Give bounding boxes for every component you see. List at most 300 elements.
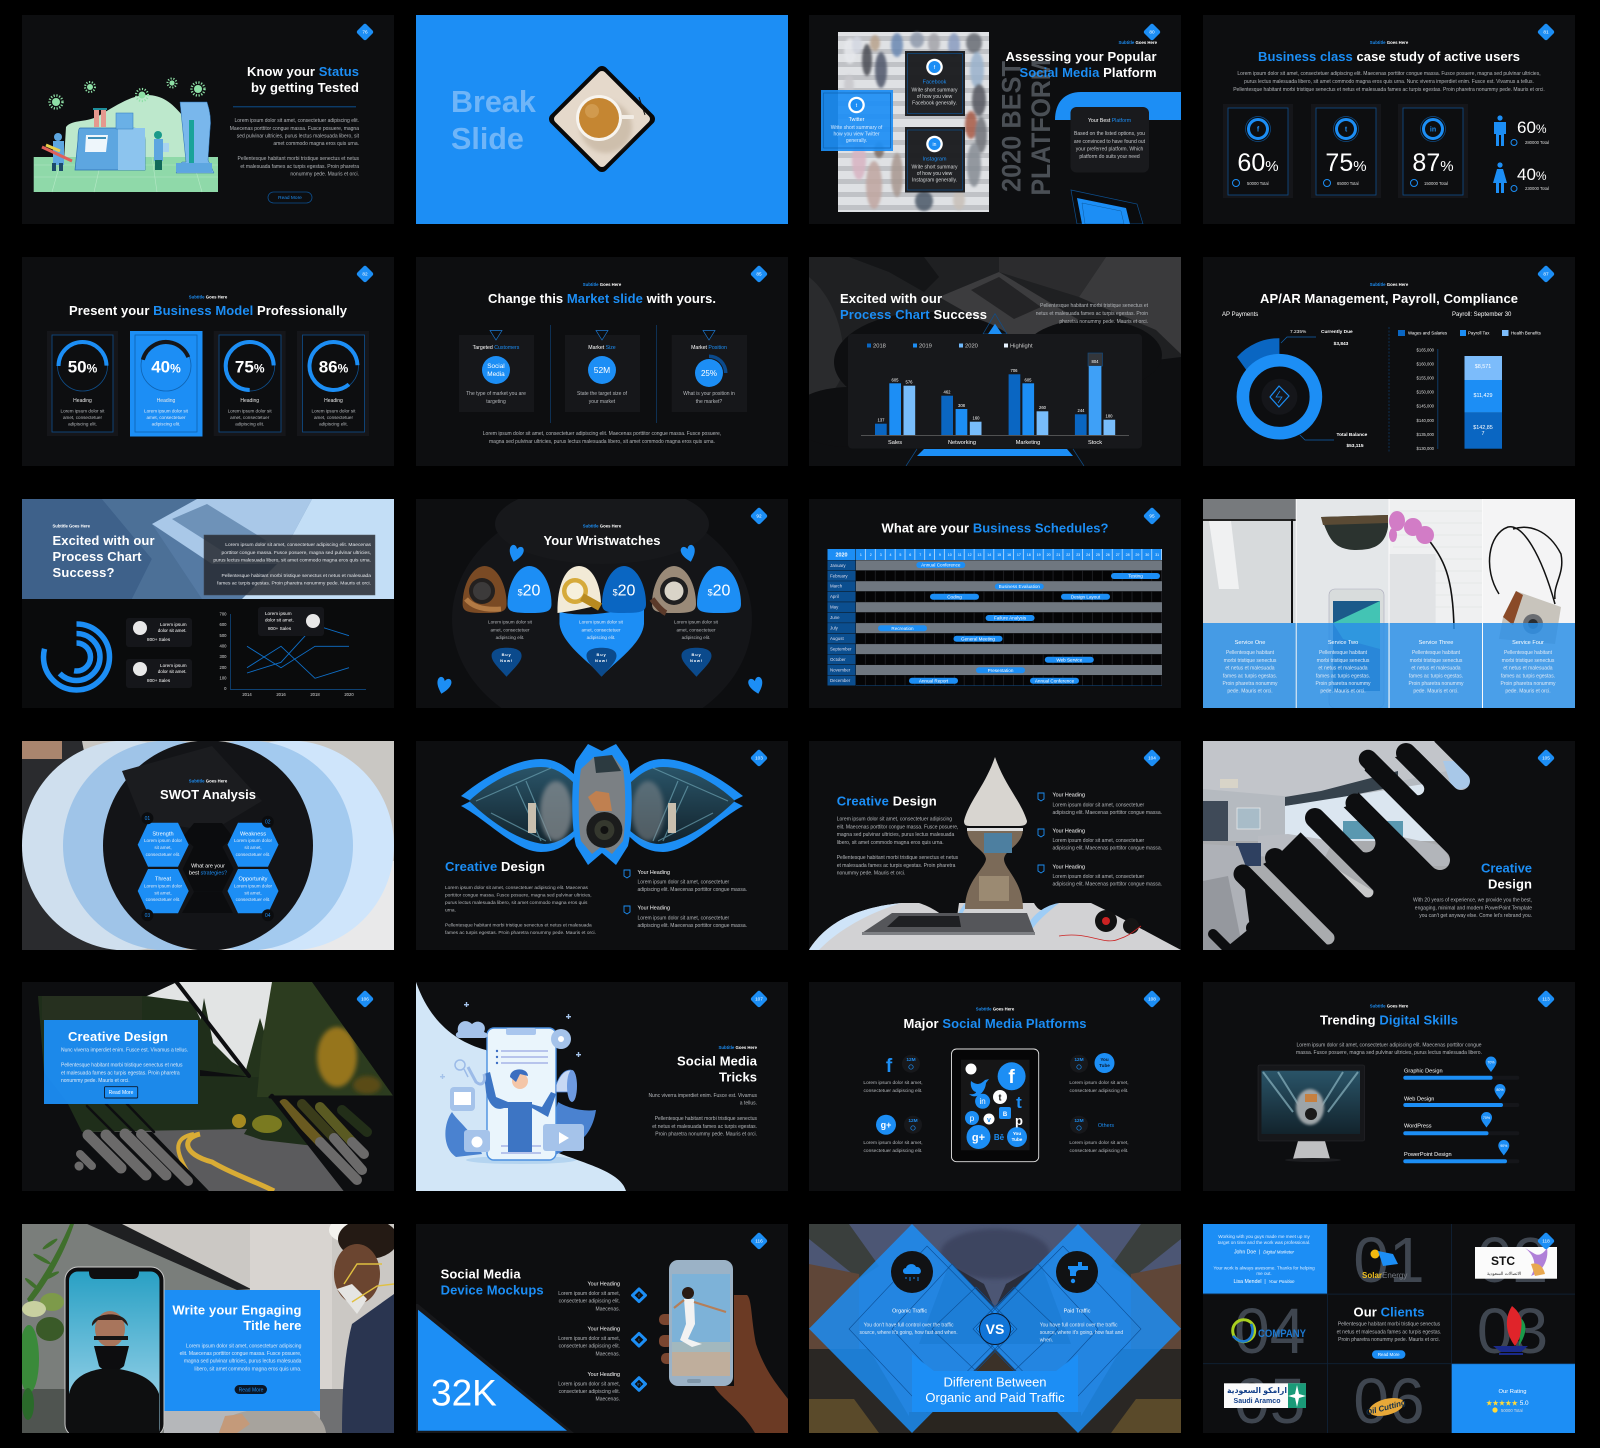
bar chart: 180	[1106, 414, 1113, 418]
body text: nonummy pede. Mauris et orci.	[837, 871, 905, 877]
service panel 1	[1203, 623, 1296, 708]
badge: 107	[755, 997, 763, 1002]
line chart: 600	[220, 622, 227, 627]
skill bar: wordpress: WordPress	[1404, 1124, 1432, 1130]
facebook stat: Lorem ipsum dolor sit amet,	[863, 1080, 923, 1086]
gantt chart header: 13	[977, 553, 981, 557]
card: market position: 25%	[701, 369, 717, 378]
badge	[1540, 268, 1552, 280]
panel: slide 118 our clients	[1203, 1224, 1575, 1437]
card: your best platform: are convinced to have found out	[1074, 139, 1146, 145]
slide background	[809, 499, 1181, 708]
list item 1	[558, 1281, 646, 1312]
checklist item 3: Lorem ipsum dolor sit amet, consectetuer	[1052, 874, 1145, 880]
y axis: $165,000	[1417, 348, 1435, 352]
road photo	[22, 982, 394, 1191]
card: 86%	[297, 331, 369, 436]
stacked bar chart: $8,571	[1475, 364, 1491, 370]
card: 75%	[214, 331, 286, 436]
stat card 2	[126, 659, 192, 688]
slide background	[809, 982, 1181, 1191]
header text: Process Chart	[52, 549, 142, 564]
card: 40% highlighted: amet, consectetuer	[146, 415, 186, 420]
service panel 4: pede. Mauris et orci.	[1505, 689, 1551, 695]
schedule bars: Annual Report	[919, 678, 949, 683]
title: Trending Digital Skills	[1320, 1013, 1458, 1028]
google plus stat: Lorem ipsum dolor sit amet,	[863, 1140, 923, 1146]
intro text: Pellentesque habitant morbi tristique senectus et netus et malesuada fames ac turpis egestas. Proin pharetra nonummy pede. Mauris et orci.	[1233, 87, 1545, 93]
tooltip card: Lorem ipsum	[265, 611, 292, 616]
monitor with photo	[1258, 1065, 1365, 1162]
card: market size: 52M	[594, 365, 610, 375]
quadrant numbers: 01	[145, 816, 150, 822]
gantt chart header: 14	[987, 553, 991, 557]
gantt chart header: 23	[1076, 553, 1080, 557]
body text: sed pulvinar ultricies, purus lectus malesuada libero, sit	[237, 134, 360, 140]
device corner graphic	[1071, 190, 1143, 224]
panel: slide 80 popular social media platform	[809, 15, 1181, 224]
testimonial cell: Lisa Mendel | Your Position	[1234, 1279, 1295, 1285]
gantt chart header: 8	[929, 553, 931, 557]
service panel 3: et netus et malesuada	[1411, 666, 1461, 672]
list item 3: in	[637, 1382, 641, 1387]
card: 40% highlighted	[130, 331, 202, 436]
skill bar: powerpoint design: PowerPoint Design	[1404, 1152, 1452, 1158]
testimonial cell	[1203, 1224, 1327, 1294]
organic traffic text: You don't have full control over the traffic	[864, 1322, 954, 1328]
gantt chart header: 28	[1126, 553, 1130, 557]
service panel 3: morbi tristique senectus	[1410, 658, 1463, 664]
card: 86%: Heading	[324, 398, 343, 404]
blue text card: et malesuada fames ac turpis egestas. Proin pharetra	[61, 1070, 180, 1076]
tablet with social icons: p	[1015, 1113, 1023, 1128]
card: your best platform: platform do suits your need	[1079, 154, 1140, 160]
panel: slide 103 creative design wings	[416, 741, 788, 950]
card: your best platform	[1070, 107, 1149, 172]
slide background	[809, 741, 1181, 950]
bar chart: 137	[878, 418, 885, 422]
service panel 3: Proin pharetra nonummy	[1408, 681, 1464, 687]
footer text: magna sed pulvinar ultricies, purus lectus malesuada libero, sit amet commodo magna eros quis urna.	[489, 439, 715, 445]
panel: SWOT analysis	[22, 740, 394, 950]
bar chart: 576	[906, 380, 913, 384]
schedule bars: Web Service	[1056, 657, 1083, 662]
column dividers	[550, 325, 657, 423]
badge	[1540, 26, 1552, 38]
panel: slide 116 device mockups	[416, 1224, 788, 1433]
google plus stat: 12M	[908, 1118, 918, 1124]
logo: oil flame	[1493, 1306, 1528, 1355]
photo background: office	[19, 1218, 398, 1433]
list item 3	[558, 1372, 646, 1403]
hexagon: threat: consectetuer elit.	[146, 897, 180, 902]
heading: Break Slide: Break	[451, 85, 536, 119]
stat card 1: 800+ Sales	[147, 637, 171, 642]
blue text card: Creative Design	[68, 1029, 168, 1044]
title: Social Media	[441, 1267, 521, 1282]
gantt chart header: 20	[1047, 553, 1051, 557]
card: targeted customers: targeting	[486, 399, 506, 405]
dark text box: Lorem ipsum dolor sit amet, consectetuer adipiscing elit. Maecenas	[225, 542, 372, 548]
male statistic: 60%	[1517, 118, 1547, 137]
illustration: phone with man and megaphone	[440, 1002, 596, 1164]
gantt chart header: 12	[968, 553, 972, 557]
checklist item 3	[1038, 864, 1162, 888]
diamond: organic traffic	[809, 1224, 1015, 1433]
gantt chart header: 29	[1135, 553, 1139, 557]
service panel 1: morbi tristique senectus	[1224, 658, 1277, 664]
badge	[753, 1235, 765, 1247]
hexagon: strength: Lorem ipsum dolor	[144, 838, 182, 843]
donut callouts: Total Balance	[1336, 432, 1368, 438]
line chart: 500	[220, 633, 227, 638]
title banner	[912, 1354, 1078, 1412]
paid traffic text: when.	[1040, 1338, 1053, 1344]
list item 1: f	[638, 1293, 640, 1298]
schedule bars: Design Layout	[1071, 594, 1101, 599]
buy now buttons: Buy	[502, 652, 512, 657]
checklist item 3: adipiscing elit. Maecenas porttitor congue massa.	[1052, 882, 1162, 888]
hexagon: threat	[138, 869, 189, 913]
month labels: November	[830, 668, 851, 672]
card: Facebook: Facebook generally.	[912, 100, 957, 106]
panel: slide 82 business model	[22, 257, 394, 466]
checklist item 2	[624, 906, 747, 929]
product descriptions: Lorem ipsum dolor sit	[579, 620, 624, 625]
panel: engaging title with phone photo	[19, 1218, 398, 1438]
slide background	[1203, 982, 1575, 1191]
subtitle: Subtitle Goes Here	[1370, 1003, 1409, 1008]
body text: Pellentesque habitant morbi tristique senectus et netus et malesuada	[445, 923, 592, 929]
youtube stat: consectetuer adipiscing elit.	[1070, 1088, 1128, 1094]
buy now buttons: Buy	[597, 652, 606, 657]
blue title panel: Write your Engaging	[172, 1303, 301, 1318]
service panel 4: et netus et malesuada	[1503, 666, 1553, 672]
line chart: 2014	[242, 692, 252, 697]
body text: Lorem ipsum dolor sit amet, consectetuer adipiscing elit.	[234, 118, 359, 124]
striped interior photo	[1203, 741, 1575, 950]
body text: et netus et malesuada fames ac turpis egestas.	[652, 1124, 757, 1130]
y axis: $150,000	[1417, 390, 1435, 394]
card: targeted customers: Social	[487, 363, 505, 370]
blue title panel	[164, 1290, 320, 1411]
watch photo 2	[557, 566, 601, 613]
y axis: $130,000	[1417, 446, 1435, 451]
hexagon: weakness	[228, 823, 278, 867]
our clients text	[1337, 1304, 1441, 1359]
checklist item 2	[1038, 829, 1162, 852]
legend: Wages and Salaries	[1408, 330, 1448, 336]
youtube stat: 12M	[1074, 1057, 1084, 1063]
big numerals: 05	[1234, 1365, 1305, 1437]
card: 50%: Heading	[73, 398, 92, 404]
service panel 2: fames ac turpis egestas.	[1316, 674, 1370, 680]
stat card: 60%: 60%	[1237, 149, 1279, 177]
blue title panel: Lorem ipsum dolor sit amet, consectetuer adipiscing	[186, 1343, 302, 1349]
blue text card: nonummy pede. Mauris et orci.	[61, 1078, 130, 1084]
badge: 95	[1149, 514, 1155, 519]
buy now buttons: Now!	[595, 658, 608, 663]
dark text box: fames ac turpis egestas. Proin pharetra nonummy pede. Mauris et orci.	[217, 580, 371, 586]
stat card: 87%: 150000 Total	[1424, 181, 1448, 186]
tablet with social icons: in	[979, 1097, 986, 1106]
bar chart: 706	[1010, 368, 1018, 373]
stat card 2: dolor sit amet.	[158, 669, 187, 674]
hexagon: strength: Strength	[152, 831, 174, 837]
bar chart: 260	[1039, 405, 1047, 410]
coffee cup in diamond	[555, 72, 649, 166]
blue triangle with 32K	[416, 1304, 574, 1433]
month labels: December	[830, 678, 851, 683]
body text: Proin pharetra nonummy pede. Mauris et orci.	[655, 1132, 757, 1138]
photo background	[22, 741, 394, 950]
body text: porttitor congue massa. Fusce posuere, magna sed pulvinar ultricies,	[445, 893, 592, 899]
badge: 92	[756, 514, 762, 519]
donut chart	[1237, 338, 1316, 433]
logo: STC: STC	[1491, 1254, 1515, 1268]
card: 50%: Lorem ipsum dolor sit	[61, 409, 105, 414]
card: Instagram: Instagram	[923, 156, 947, 162]
divider	[1388, 327, 1390, 452]
donut callouts: Currently Due	[1321, 329, 1353, 335]
service panel 2: Service Two	[1328, 640, 1358, 646]
bar chart: 160	[972, 416, 980, 420]
testimonial cell: target on time and the work was professional.	[1218, 1240, 1310, 1245]
bar chart: 2018	[873, 344, 886, 350]
logo: solar energy: SolarEnergy	[1362, 1271, 1407, 1280]
badge	[1540, 1235, 1552, 1247]
card: 40% highlighted: 40%	[151, 358, 181, 376]
skill bar: web design: 80%	[1496, 1088, 1504, 1092]
side text: netus et malesuada fames ac turpis egestas. Proin	[1036, 311, 1148, 317]
list item 2: consectetuer adipiscing elit.	[559, 1344, 620, 1350]
blue text card: Nunc viverra imperdiet enim. Fusce est. Vivamus a tellus.	[61, 1047, 188, 1053]
body text: fames ac turpis egestas. Proin pharetra nonummy pede. Mauris et orci.	[445, 930, 596, 936]
gantt chart header: 25	[1096, 553, 1100, 557]
facebook stat: consectetuer adipiscing elit.	[864, 1088, 922, 1094]
card: 75%: Lorem ipsum dolor sit	[228, 409, 272, 414]
schedule bars: Testing	[1128, 574, 1143, 579]
photo: crowd on crosswalk	[838, 32, 989, 212]
blue title panel: magna sed pulvinar ultricies, purus lectus malesuada	[184, 1359, 302, 1365]
youtube stat	[1069, 1053, 1129, 1094]
rating cell: Our Rating	[1498, 1389, 1527, 1395]
checklist item 2: Lorem ipsum dolor sit amet, consectetuer	[1052, 838, 1145, 844]
skill bar: web design	[1403, 1084, 1519, 1107]
slide background	[416, 1224, 788, 1433]
month labels: June	[830, 615, 840, 620]
service panel 1: et netus et malesuada	[1225, 666, 1275, 672]
tablet with social icons: You	[1013, 1131, 1021, 1136]
slide background	[1203, 741, 1575, 950]
organic traffic text: Organic Traffic	[892, 1308, 927, 1314]
month labels: April	[830, 594, 839, 599]
female statistic: 40%	[1517, 165, 1547, 184]
phone mockup with man	[65, 1267, 164, 1438]
list item 1: Lorem ipsum dolor sit amet,	[558, 1291, 620, 1297]
checklist item 3: Your Heading	[1052, 864, 1085, 870]
bar chart: Stock	[1088, 440, 1102, 446]
badge: 85	[756, 272, 762, 277]
diamond: paid traffic	[974, 1224, 1181, 1433]
badge	[359, 268, 371, 280]
service panel 3	[1390, 623, 1482, 708]
facebook stat	[863, 1055, 923, 1094]
buy now buttons: Now!	[500, 658, 513, 663]
section labels	[1222, 312, 1512, 318]
month labels	[828, 560, 856, 686]
badge and subtitle: 80	[1149, 30, 1155, 35]
checklist item 1	[1038, 793, 1162, 816]
bar chart: Sales	[888, 440, 902, 446]
badge: 87	[1543, 272, 1549, 277]
dark text box: Pellentesque habitant morbi tristique senectus et netus et malesuada	[221, 573, 371, 579]
bar chart: Marketing	[1016, 440, 1040, 446]
stat card: 75%: 75%	[1325, 149, 1367, 177]
skill bar: powerpoint design	[1403, 1140, 1519, 1163]
side text: pharetra nonummy pede. Mauris et orci.	[1059, 319, 1148, 325]
panel: slide 85 market slide	[416, 257, 788, 466]
bar chart: Highlight	[1010, 344, 1033, 350]
slide background	[809, 15, 1181, 224]
paid traffic text	[1040, 1308, 1123, 1344]
card: Facebook: Facebook	[923, 80, 947, 86]
title: Social Media Platform	[1020, 65, 1156, 80]
list item 2	[558, 1327, 646, 1357]
title: Device Mockups	[441, 1283, 544, 1298]
product descriptions: Lorem ipsum dolor sit	[674, 620, 719, 625]
card: targeted customers: The type of market you are	[466, 391, 526, 397]
y axis: $140,000	[1417, 418, 1435, 423]
photo background: laptop	[789, 257, 1181, 466]
tablet with social icons: g+	[972, 1132, 985, 1144]
legend: Health Benefits	[1511, 330, 1542, 336]
body text: With 20 years of experience, we provide you the best,	[1413, 898, 1532, 904]
panel: slide 108 major social media platforms	[809, 982, 1181, 1191]
heading: Break Slide: Slide	[451, 122, 524, 156]
slide background	[416, 741, 788, 950]
title: Major Social Media Platforms	[904, 1016, 1086, 1031]
stacked bar chart	[1464, 356, 1502, 449]
photo: camera with strap	[1483, 499, 1575, 708]
slide background	[22, 257, 394, 466]
body text: a tellus.	[740, 1100, 757, 1106]
price tag 2: $20	[613, 583, 636, 600]
title: Process Chart Success	[840, 307, 987, 322]
checklist item 2: Lorem ipsum dolor sit amet, consectetuer	[638, 916, 730, 922]
hexagon: opportunity: consectetuer elit.	[236, 897, 270, 902]
big numerals: 04	[1234, 1295, 1305, 1367]
quadrant numbers	[141, 812, 274, 921]
card: Twitter: generally.	[846, 138, 867, 144]
subtitle: Subtitle Goes Here	[583, 282, 622, 287]
title: Design	[1488, 877, 1532, 892]
service panel 2: et netus et malesuada	[1318, 666, 1368, 672]
gantt chart header	[828, 549, 1162, 560]
skill bar: powerpoint design: 90%	[1500, 1144, 1508, 1148]
body text: Nunc viverra imperdiet enim. Fusce est. Vivamus	[648, 1093, 757, 1099]
bar chart: 462	[944, 390, 951, 394]
checklist item 1: Your Heading	[1052, 793, 1085, 799]
page number badge: 76	[362, 30, 368, 35]
blue title panel: libero, sit amet commodo magna eros quis urna.	[194, 1366, 301, 1372]
photo: orchid on white brick	[1389, 499, 1482, 708]
title banner: Organic and Paid Traffic	[925, 1390, 1065, 1405]
body text: Lorem ipsum dolor sit amet, consectetuer adipiscing	[837, 817, 952, 823]
card: your best platform: your preferred platform. Which	[1076, 146, 1143, 152]
gantt chart header: 5	[899, 553, 901, 557]
product descriptions	[488, 620, 719, 640]
card: 40% highlighted: adipiscing elit.	[152, 422, 180, 427]
overlapping circles	[22, 740, 394, 950]
badge	[1540, 752, 1552, 764]
bar chart: 804	[1092, 359, 1099, 364]
badge	[359, 993, 371, 1005]
card: your best platform: Your Best Platform	[1088, 118, 1131, 124]
product descriptions: amet, consectetuer	[676, 627, 716, 632]
youtube stat: Tube	[1099, 1063, 1110, 1068]
hexagon: strength: consectetuer elit.	[146, 852, 180, 857]
slide background	[22, 982, 394, 1191]
month labels: September	[830, 647, 852, 652]
card: Twitter: Write short summary of	[831, 125, 883, 131]
watch photo 1	[463, 566, 507, 613]
badge: 116	[755, 1239, 763, 1244]
autumn and road stripes right	[284, 1104, 367, 1180]
panel: slide 95 business schedules	[809, 499, 1181, 708]
paid traffic text: You have full control over the traffic	[1040, 1322, 1118, 1328]
gantt chart header: 21	[1056, 553, 1060, 557]
card: market size: Market Size	[588, 345, 616, 351]
testimonial cell: Working with you guys made me meet up my	[1218, 1234, 1310, 1239]
schedule bars: Presentation	[988, 668, 1014, 673]
gantt chart header: 15	[997, 553, 1001, 557]
badge	[753, 268, 765, 280]
hexagon: opportunity	[228, 869, 278, 913]
body text: et malesuada fames ac turpis egestas. Proin pharetra	[837, 863, 956, 869]
card: 75%: amet, consectetuer	[230, 415, 270, 420]
card: Instagram: Instagram generally.	[912, 178, 957, 184]
title: Know your Status	[247, 64, 359, 79]
title: Creative	[1481, 860, 1532, 875]
skill bar: wordpress: 70%	[1483, 1116, 1491, 1120]
body text: Pellentesque habitant morbi tristique senectus et netus	[837, 855, 959, 861]
photo background: bridge at dusk	[809, 1224, 1181, 1433]
section labels: Payroll: September 30	[1452, 312, 1512, 318]
y axis	[1417, 348, 1438, 451]
badge	[753, 752, 765, 764]
section labels: AP Payments	[1222, 312, 1258, 318]
bar chart: 308	[958, 403, 966, 408]
big numerals: 01	[1353, 1224, 1425, 1296]
line chart: 2020	[344, 692, 354, 697]
panel: slide 81 case study of active users	[1203, 15, 1575, 224]
donut callouts: 7.235%	[1290, 329, 1307, 335]
skill bar: graphic design	[1403, 1056, 1519, 1080]
logo: saudi aramco: ارامكو السعودية	[1227, 1386, 1287, 1395]
hexagon: weakness: Lorem ipsum dolor	[234, 838, 272, 843]
panel: slide 106 creative design road	[22, 980, 394, 1193]
paid traffic text: source, where it's going, how fast and	[1040, 1330, 1123, 1336]
gantt chart header: 24	[1086, 553, 1090, 557]
badge	[1146, 752, 1158, 764]
gantt chart header: 16	[1007, 553, 1011, 557]
blue text card: Read More	[109, 1090, 134, 1096]
card: market position: What is your position in	[683, 391, 735, 397]
vertical label: 2020 BEST: 2020 BEST	[996, 61, 1026, 192]
stat card: 75%: t	[1345, 126, 1348, 134]
center question: best strategies?	[189, 871, 227, 877]
